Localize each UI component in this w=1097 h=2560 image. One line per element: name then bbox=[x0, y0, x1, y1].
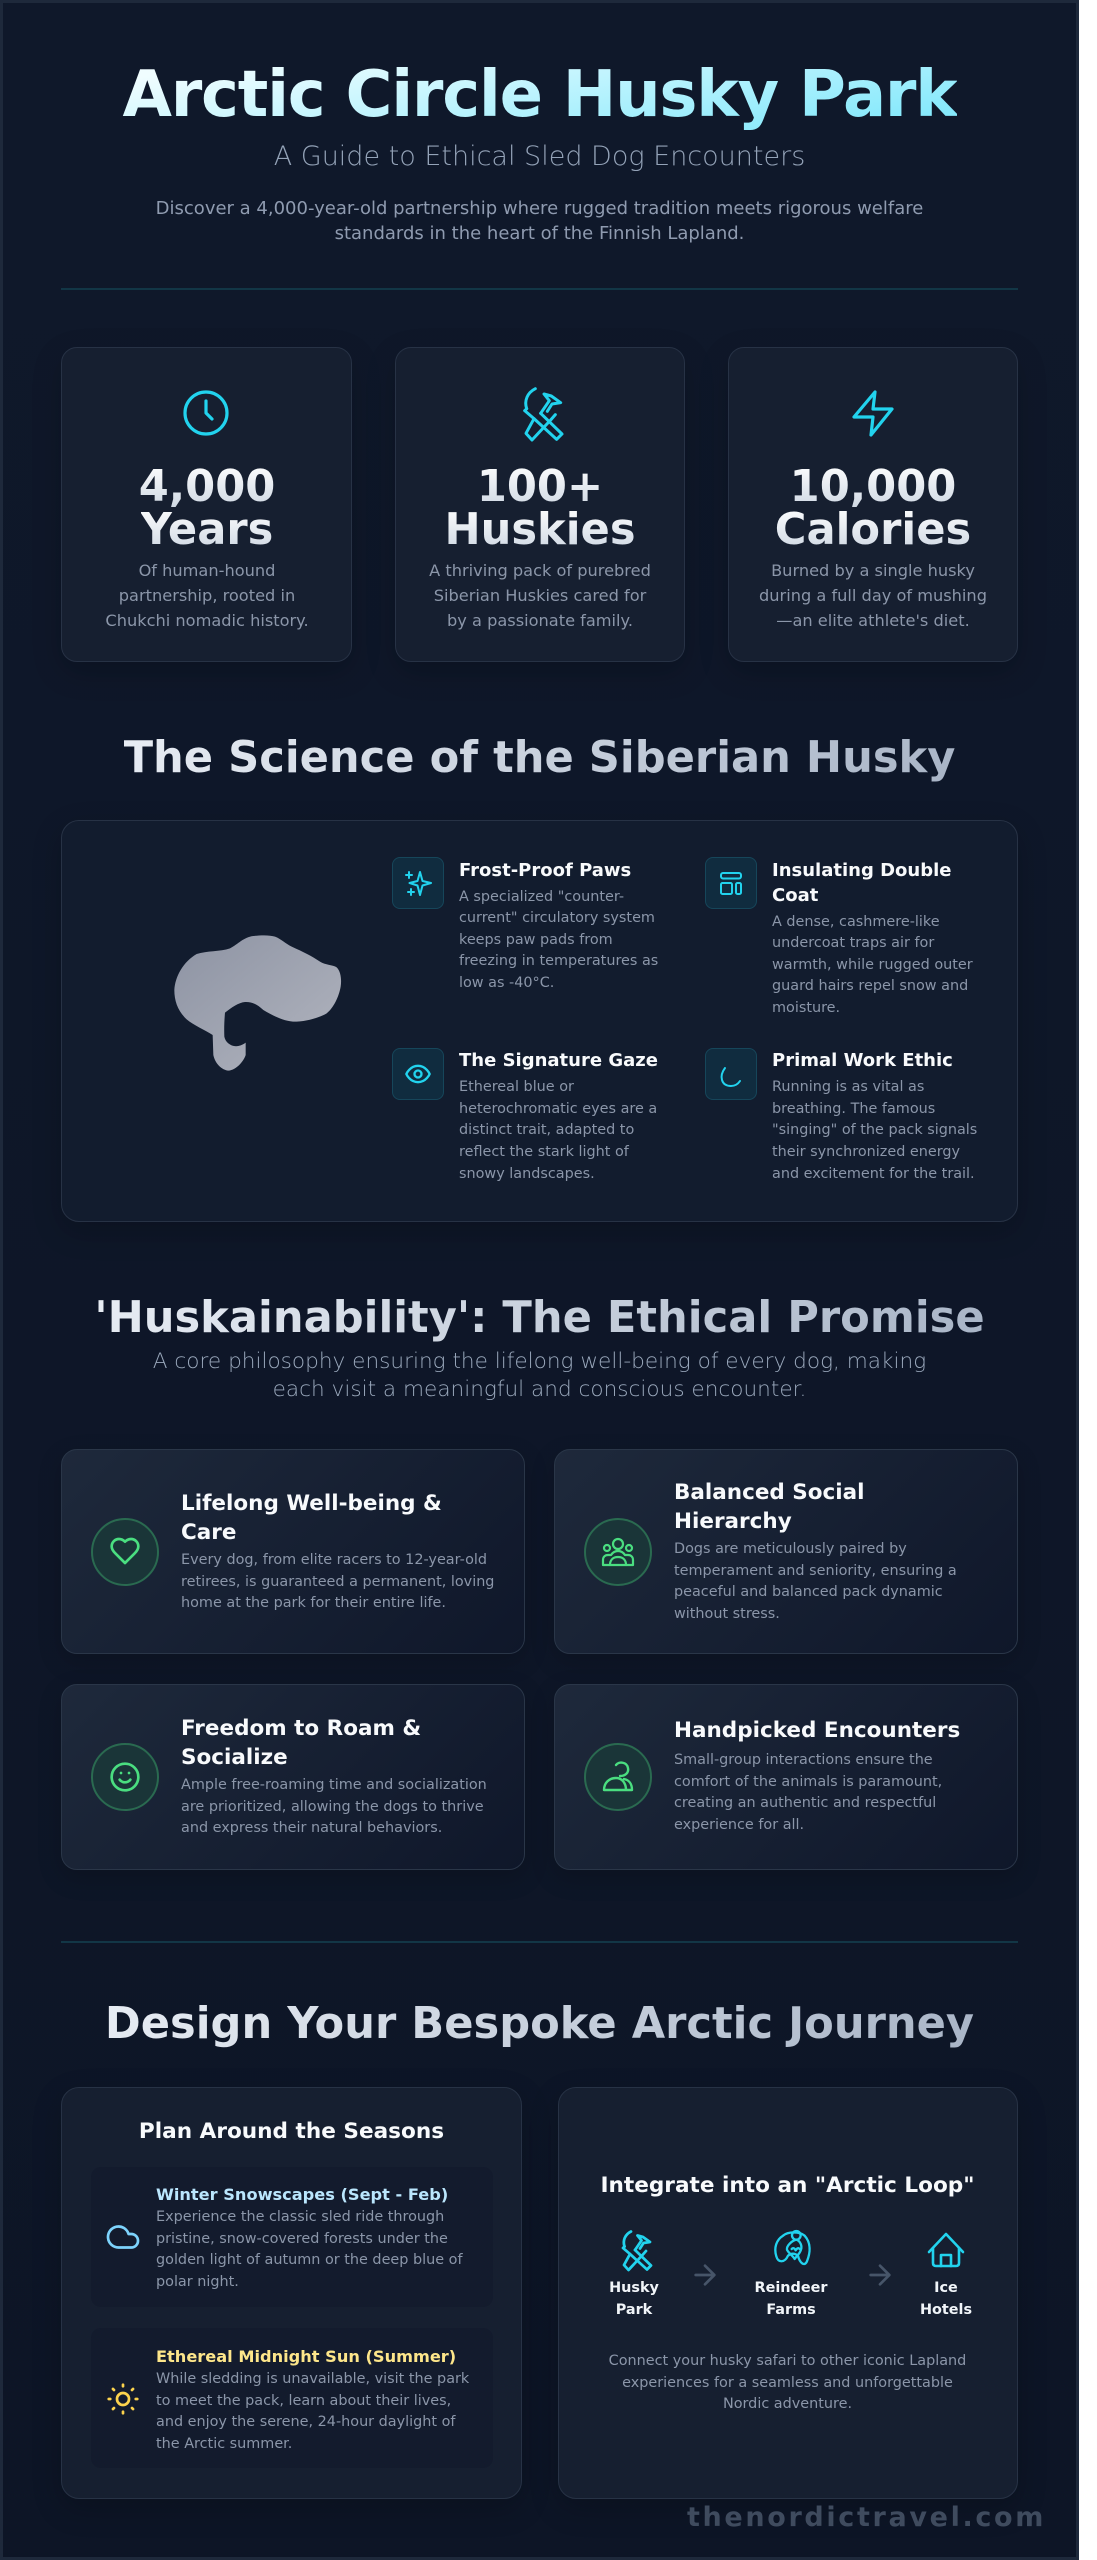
season text: summer: and enjoy the serene, 24-hour daylight of bbox=[156, 2414, 455, 2430]
card text: handpicked encounters: experience for all. bbox=[674, 1817, 804, 1833]
stat description: huskies: A thriving pack of purebred bbox=[429, 561, 651, 580]
card text: balanced social hierarchy: without stress. bbox=[674, 1606, 780, 1622]
section intro: huskainability: each visit a meaningful and conscious encounter. bbox=[273, 1377, 806, 1402]
icon: sun bbox=[107, 2383, 139, 2415]
text: arctic loop description: Connect your husky safari to other iconic Lapland bbox=[609, 2353, 966, 2369]
season text: winter: polar night. bbox=[156, 2274, 239, 2290]
feature text: primal work ethic: and excitement for the trail. bbox=[772, 1166, 975, 1182]
icon badge: smile bbox=[91, 1743, 159, 1811]
season title: summer: Ethereal Midnight Sun (Summer) bbox=[156, 2346, 456, 2366]
stat description: calories: —an elite athlete's diet. bbox=[776, 611, 970, 630]
card title: balanced social hierarchy: Hierarchy bbox=[674, 1508, 792, 1534]
stat number: 100+ huskies: Huskies bbox=[444, 505, 636, 555]
feature text: insulating double coat: warmth, while rugged outer bbox=[772, 957, 973, 973]
card title: lifelong well-being: Care bbox=[181, 1520, 236, 1545]
label: ice hotels: Hotels bbox=[920, 2302, 972, 2318]
feature title: insulating double coat bbox=[772, 860, 951, 906]
card text: lifelong well-being bbox=[181, 1552, 494, 1611]
feature title: signature gaze: The Signature Gaze bbox=[459, 1050, 658, 1071]
feature title: frost-proof paws: Frost-Proof Paws bbox=[459, 860, 631, 881]
card text: balanced social hierarchy: Dogs are meticulously paired by bbox=[674, 1541, 907, 1557]
intro text bbox=[156, 198, 923, 244]
icon: eye bbox=[405, 1064, 431, 1084]
season text: winter: pristine, snow-covered forests under the bbox=[156, 2231, 448, 2247]
icon badge: heart bbox=[91, 1518, 159, 1586]
feature title: insulating double coat: Coat bbox=[772, 885, 818, 906]
feature text: signature gaze: Ethereal blue or bbox=[459, 1079, 574, 1095]
panel: arctic loop bbox=[558, 2087, 1018, 2499]
card text: handpicked encounters: creating an authentic and respectful bbox=[674, 1795, 936, 1811]
icon: person with hook bbox=[602, 1761, 634, 1792]
icon: heart bbox=[110, 1538, 140, 1564]
section intro: huskainability bbox=[153, 1349, 926, 1402]
feature text: primal work ethic: Running is as vital as bbox=[772, 1079, 924, 1095]
panel: seasons bbox=[61, 2087, 522, 2499]
panel: stat 100+ huskies bbox=[395, 347, 685, 662]
card text: freedom to roam: and express their natural behaviors. bbox=[181, 1820, 442, 1836]
panel: freedom to roam bbox=[61, 1684, 525, 1870]
feature text: insulating double coat: guard hairs repel snow and bbox=[772, 978, 968, 994]
icon: lightning bolt bbox=[852, 390, 894, 437]
stat description: huskies: Siberian Huskies cared for bbox=[434, 586, 646, 605]
stat description: huskies: by a passionate family. bbox=[447, 611, 633, 630]
icon: cloud bbox=[106, 2225, 140, 2249]
text: arctic loop description bbox=[558, 2351, 1018, 2416]
card text: lifelong well-being: Every dog, from elite racers to 12-year-old bbox=[181, 1552, 487, 1568]
card title: lifelong well-being bbox=[181, 1491, 442, 1545]
stat description: calories: during a full day of mushing bbox=[759, 586, 987, 605]
icon box: eye bbox=[392, 1048, 444, 1100]
card text: balanced social hierarchy bbox=[674, 1541, 957, 1622]
card title: freedom to roam: Socialize bbox=[181, 1744, 288, 1770]
stat description: calories bbox=[759, 561, 987, 630]
stat description: years: partnership, rooted in bbox=[119, 586, 295, 605]
card text: freedom to roam: Ample free-roaming time and socialization bbox=[181, 1777, 487, 1793]
card text: lifelong well-being: home at the park for their entire life. bbox=[181, 1595, 446, 1611]
feature text: insulating double coat: moisture. bbox=[772, 1000, 840, 1016]
panel: stat 4,000 years bbox=[61, 347, 352, 662]
feature text: signature gaze: snowy landscapes. bbox=[459, 1166, 595, 1182]
title: Arctic Circle Husky Park bbox=[122, 58, 957, 132]
season text: summer: While sledding is unavailable, visit the park bbox=[156, 2371, 469, 2387]
icon box: layout bbox=[705, 857, 757, 909]
stat number: 10,000 calories: Calories bbox=[775, 505, 971, 555]
season text: winter bbox=[156, 2209, 463, 2290]
stat number: 100+ huskies bbox=[444, 462, 636, 555]
panel: stat 10,000 calories bbox=[728, 347, 1018, 662]
card text: handpicked encounters: comfort of the animals is paramount, bbox=[674, 1774, 942, 1790]
icon: clock bbox=[183, 390, 229, 436]
arrow 2 bbox=[864, 2259, 896, 2291]
icon: reindeer bbox=[773, 2228, 811, 2270]
card text: handpicked encounters: Small-group interactions ensure the bbox=[674, 1752, 933, 1768]
subtitle: A Guide to Ethical Sled Dog Encounters bbox=[274, 141, 805, 172]
feature title: insulating double coat: Insulating Double bbox=[772, 860, 951, 881]
card text: lifelong well-being: retirees, is guaranteed a permanent, loving bbox=[181, 1574, 494, 1590]
stat description: years: Chukchi nomadic history. bbox=[105, 611, 309, 630]
stat number: 10,000 calories: 10,000 bbox=[790, 462, 956, 512]
stat description: years: Of human-hound bbox=[139, 561, 275, 580]
stat number: 4,000 years bbox=[139, 462, 275, 555]
card text: freedom to roam: are prioritized, allowing the dogs to thrive bbox=[181, 1799, 484, 1815]
card text: balanced social hierarchy: peaceful and balanced pack dynamic bbox=[674, 1584, 943, 1600]
arrow 1 bbox=[689, 2259, 721, 2291]
feature title: primal work ethic: Primal Work Ethic bbox=[772, 1050, 953, 1071]
feature text: primal work ethic: "singing" of the pack signals bbox=[772, 1122, 977, 1138]
icon: pickaxe bbox=[523, 387, 564, 442]
feature text: primal work ethic: their synchronized energy bbox=[772, 1144, 960, 1160]
icon: coat layers bbox=[720, 872, 742, 895]
feature text: signature gaze: heterochromatic eyes are a bbox=[459, 1101, 657, 1117]
icon: husky park pickaxe bbox=[612, 2225, 664, 2278]
heading: science: The Science of the Siberian Husky bbox=[124, 732, 955, 782]
card title: freedom to roam bbox=[181, 1716, 421, 1770]
season box: winter bbox=[91, 2167, 493, 2307]
card text: freedom to roam bbox=[181, 1777, 487, 1836]
card title: balanced social hierarchy bbox=[674, 1480, 865, 1534]
icon: group bbox=[602, 1538, 634, 1566]
card title: handpicked encounters: Handpicked Encounters bbox=[674, 1718, 960, 1743]
season text: summer: the Arctic summer. bbox=[156, 2436, 292, 2452]
feature text: signature gaze bbox=[459, 1079, 657, 1182]
heading: bespoke journey: Design Your Bespoke Arctic Journey bbox=[105, 1998, 974, 2048]
feature text: frost-proof paws: A specialized "counter- bbox=[459, 889, 624, 905]
heading: huskainability: 'Huskainability': The Ethical Promise bbox=[94, 1292, 985, 1342]
label: husky park: Park bbox=[616, 2302, 652, 2318]
feature text: frost-proof paws: low as -40°C. bbox=[459, 975, 554, 991]
card text: balanced social hierarchy: temperament and seniority, ensuring a bbox=[674, 1563, 957, 1579]
feature text: frost-proof paws: current" circulatory system bbox=[459, 910, 655, 926]
stat description: years bbox=[105, 561, 309, 630]
card title: lifelong well-being: Lifelong Well-being & bbox=[181, 1491, 442, 1516]
stat description: huskies bbox=[429, 561, 651, 630]
panel title: seasons: Plan Around the Seasons bbox=[139, 2118, 444, 2144]
label: reindeer farms: Farms bbox=[766, 2302, 816, 2318]
intro text: standards in the heart of the Finnish Lapland. bbox=[335, 223, 744, 244]
icon: smile bbox=[110, 1762, 140, 1792]
panel: science bbox=[61, 820, 1018, 1222]
label: ice hotels: Ice bbox=[934, 2280, 958, 2296]
feature text: signature gaze: reflect the stark light of bbox=[459, 1144, 629, 1160]
icon: hook arc bbox=[720, 1067, 741, 1087]
card title: freedom to roam: Freedom to Roam & bbox=[181, 1716, 421, 1740]
text: arctic loop description: Nordic adventure. bbox=[723, 2396, 852, 2412]
stat number: 100+ huskies: 100+ bbox=[477, 462, 603, 512]
feature text: frost-proof paws: keeps paw pads from bbox=[459, 932, 613, 948]
intro text: Discover a 4,000-year-old partnership where rugged tradition meets rigorous welfare bbox=[156, 198, 923, 219]
label: reindeer farms bbox=[731, 2278, 851, 2322]
section intro: huskainability: A core philosophy ensuring the lifelong well-being of every dog, making bbox=[153, 1349, 926, 1374]
feature text: frost-proof paws bbox=[459, 889, 658, 991]
feature text: insulating double coat bbox=[772, 914, 973, 1016]
label: husky park: Husky bbox=[609, 2280, 659, 2296]
icon box: sparkles bbox=[392, 857, 444, 909]
icon: sparkles bbox=[405, 871, 432, 896]
icon: house bbox=[925, 2230, 967, 2270]
card text: handpicked encounters bbox=[674, 1752, 942, 1833]
label: husky park bbox=[584, 2278, 684, 2322]
feature text: insulating double coat: A dense, cashmere-like bbox=[772, 914, 940, 930]
stat number: 4,000 years: Years bbox=[141, 505, 273, 555]
feature text: primal work ethic bbox=[772, 1079, 977, 1182]
feature text: insulating double coat: undercoat traps air for bbox=[772, 935, 934, 951]
feature text: primal work ethic: breathing. The famous bbox=[772, 1101, 935, 1117]
icon box: work ethic bbox=[705, 1048, 757, 1100]
illustration: husky silhouette bbox=[174, 935, 342, 1071]
stat number: 10,000 calories bbox=[775, 462, 971, 555]
panel: lifelong well-being bbox=[61, 1449, 525, 1654]
label: reindeer farms: Reindeer bbox=[755, 2280, 827, 2296]
watermark: thenordictravel.com bbox=[687, 2502, 1046, 2533]
card title: balanced social hierarchy: Balanced Social bbox=[674, 1480, 865, 1504]
icon badge: group bbox=[584, 1518, 652, 1586]
feature text: frost-proof paws: freezing in temperatures as bbox=[459, 953, 658, 969]
season title: winter: Winter Snowscapes (Sept - Feb) bbox=[156, 2184, 448, 2204]
label: ice hotels bbox=[896, 2278, 996, 2322]
panel title: arctic loop: Integrate into an "Arctic Loop" bbox=[600, 2172, 975, 2198]
season text: winter: golden light of autumn or the deep blue of bbox=[156, 2252, 463, 2268]
text: arctic loop description: experiences for a seamless and unforgettable bbox=[622, 2375, 953, 2391]
season text: summer bbox=[156, 2371, 469, 2452]
stat description: calories: Burned by a single husky bbox=[771, 561, 975, 580]
icon badge: person bbox=[584, 1743, 652, 1811]
stat number: 4,000 years: 4,000 bbox=[139, 462, 275, 512]
panel: handpicked encounters bbox=[554, 1684, 1018, 1870]
season text: winter: Experience the classic sled ride through bbox=[156, 2209, 444, 2225]
season text: summer: to meet the pack, learn about their lives, bbox=[156, 2393, 451, 2409]
season box: summer bbox=[91, 2328, 493, 2468]
feature text: signature gaze: distinct trait, adapted to bbox=[459, 1122, 634, 1138]
panel: balanced social hierarchy bbox=[554, 1449, 1018, 1654]
